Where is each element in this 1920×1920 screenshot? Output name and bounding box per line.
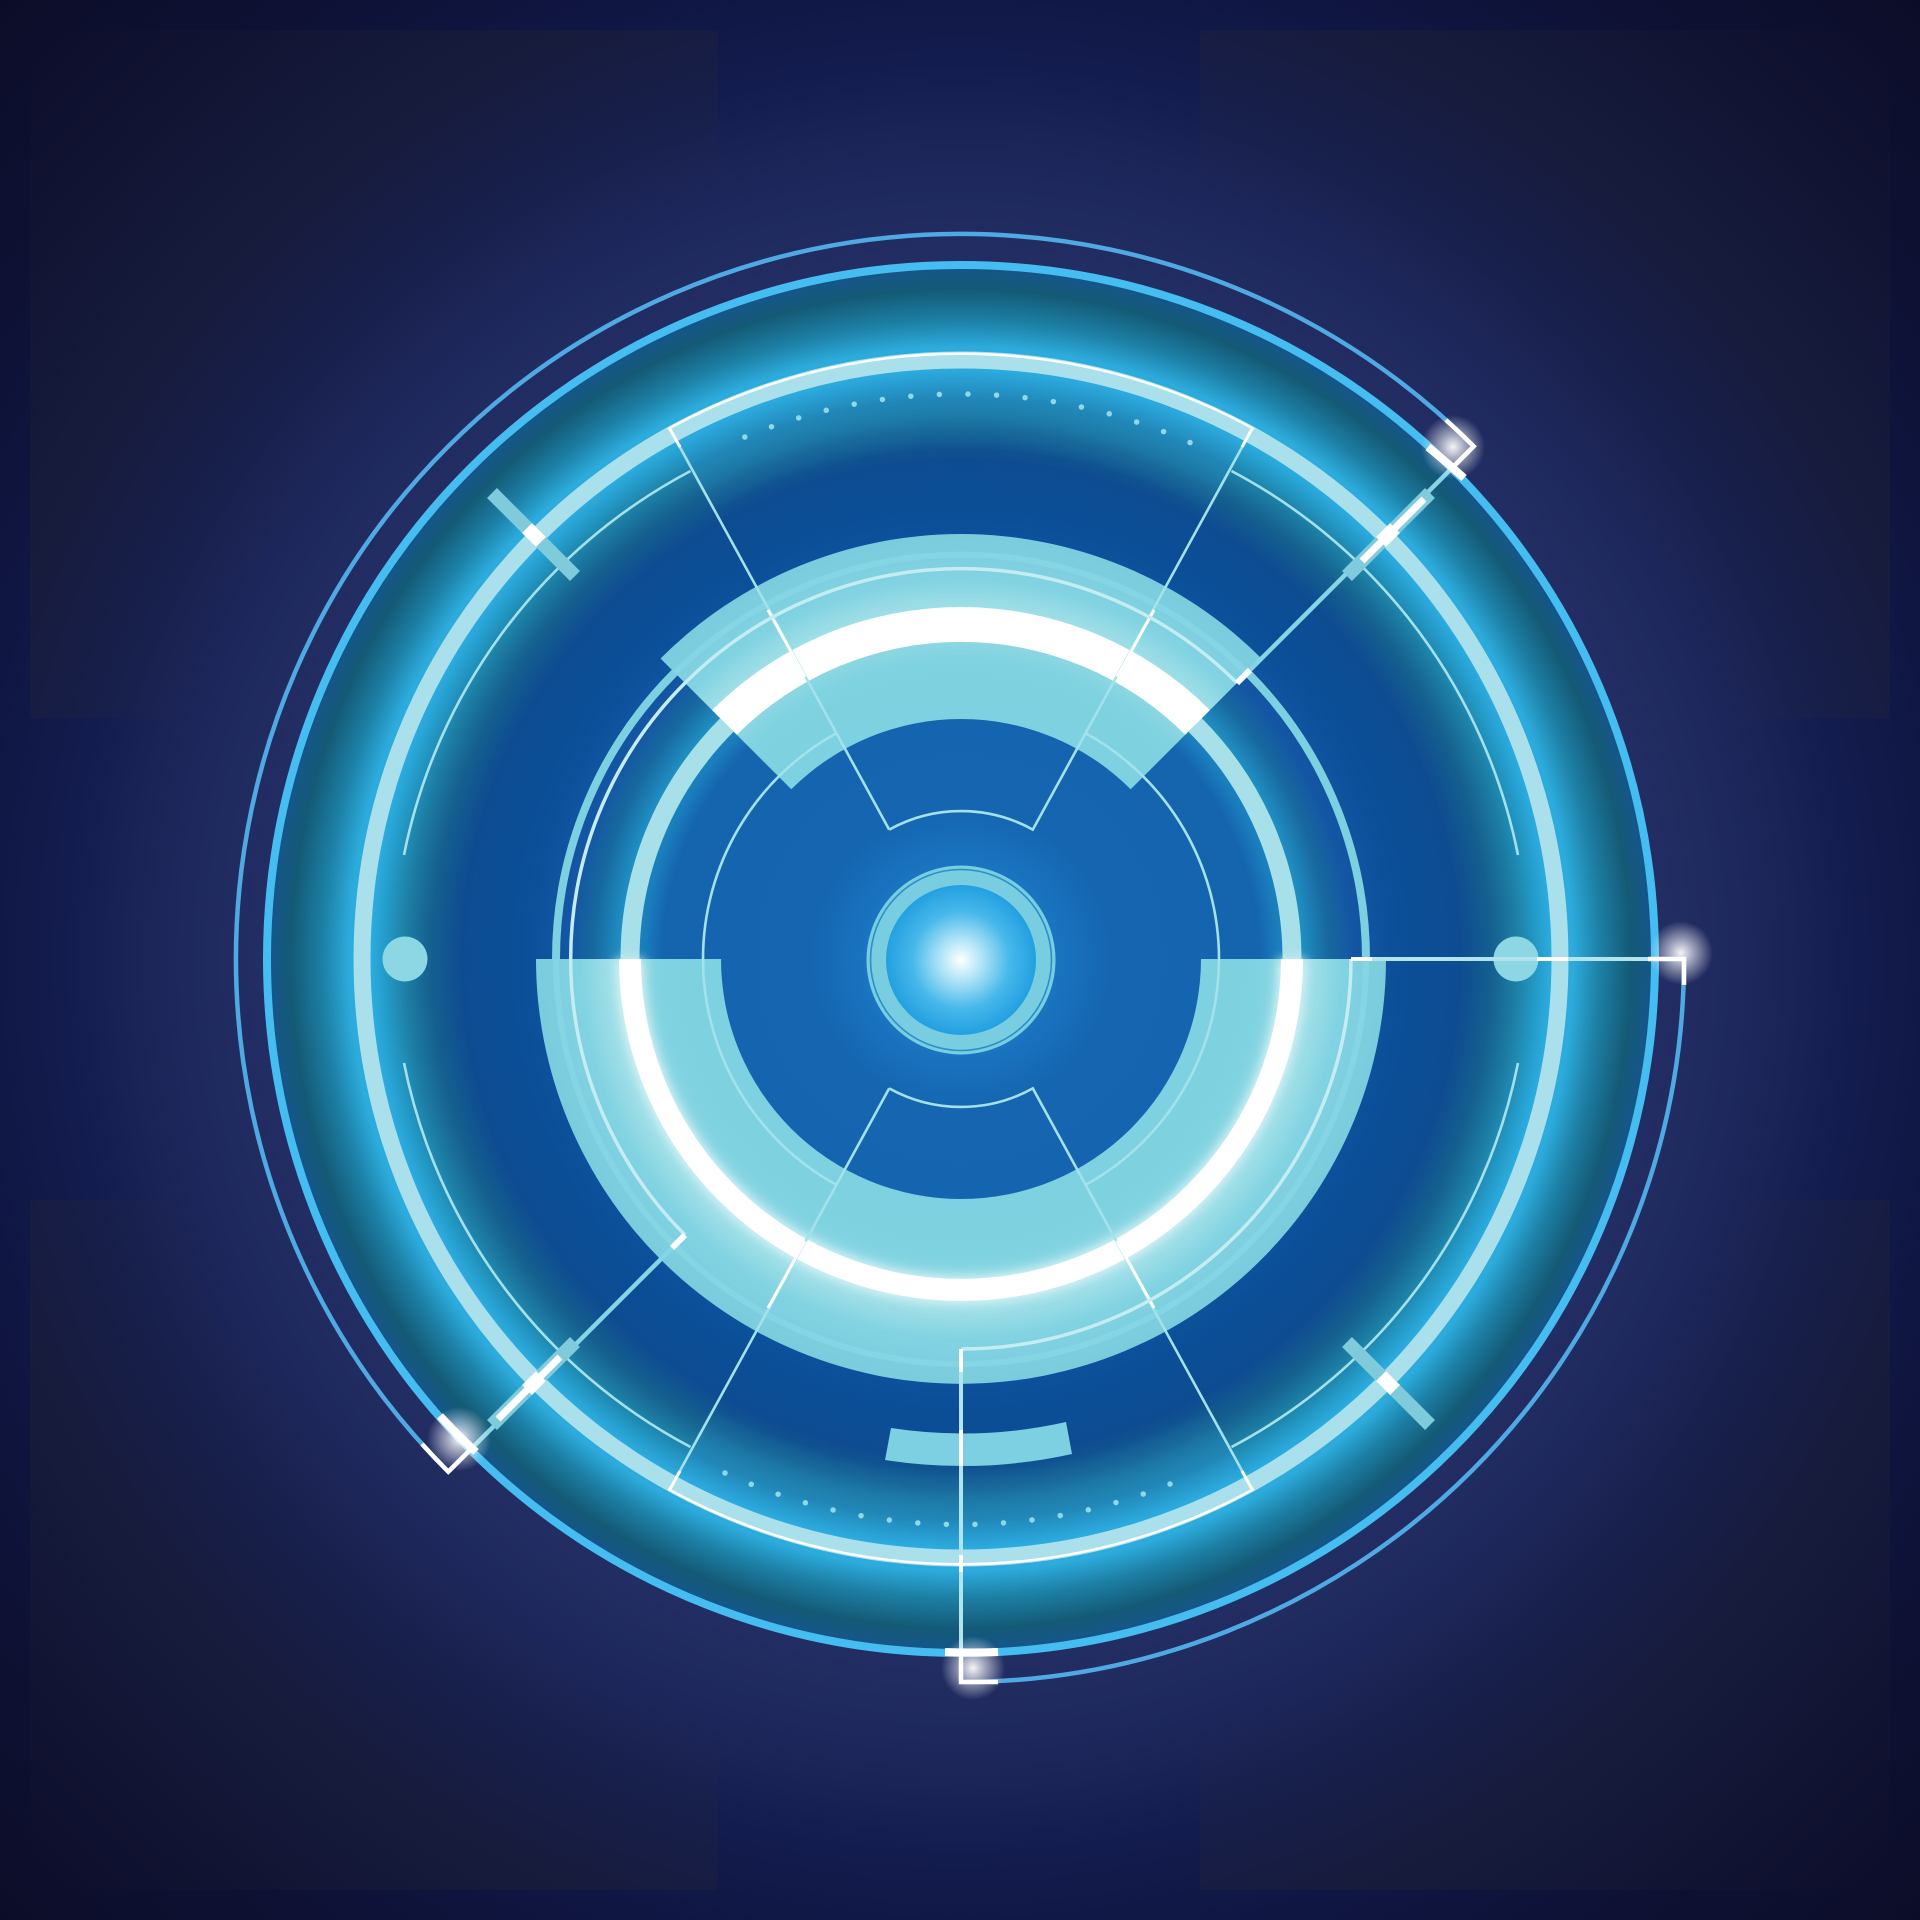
spark bottom [941, 1636, 1005, 1700]
middle rings [556, 554, 1366, 1364]
brighter bottom sector glow [675, 1396, 1247, 1549]
lower half band [536, 959, 1386, 1384]
circuit shape upper left [236, 234, 1474, 1472]
spark lower left [427, 1407, 491, 1471]
cross bar upper left [492, 493, 575, 576]
brighter top sector glow [675, 369, 1247, 522]
spark right [1649, 921, 1713, 985]
small bottom arc band [885, 1422, 1072, 1466]
spark upper right [1421, 415, 1485, 479]
cross bar upper right [1347, 493, 1430, 576]
side dot left [382, 936, 428, 982]
pale outer band [362, 354, 1560, 1564]
cross bar lower right [1347, 1342, 1430, 1425]
upper wedge band [660, 534, 1262, 789]
main outer ring [267, 265, 1655, 1653]
white highlights on outer ring [440, 447, 1464, 1653]
white lower arc [630, 959, 1292, 1290]
cross bar lower left [492, 1342, 575, 1425]
white upper wedge arc [712, 607, 1210, 735]
light rim inside the bands [556, 555, 1366, 1364]
circuit shape lower right [961, 959, 1684, 1682]
glowing disc [267, 265, 1655, 1653]
central core [866, 866, 1056, 1054]
side dot right [1494, 936, 1538, 982]
radial lines and inner arcs [404, 429, 1518, 1489]
white line segments crossing the bands [670, 429, 1252, 1489]
dotted arc bottom [725, 1473, 1175, 1525]
dotted arc top [745, 394, 1197, 446]
